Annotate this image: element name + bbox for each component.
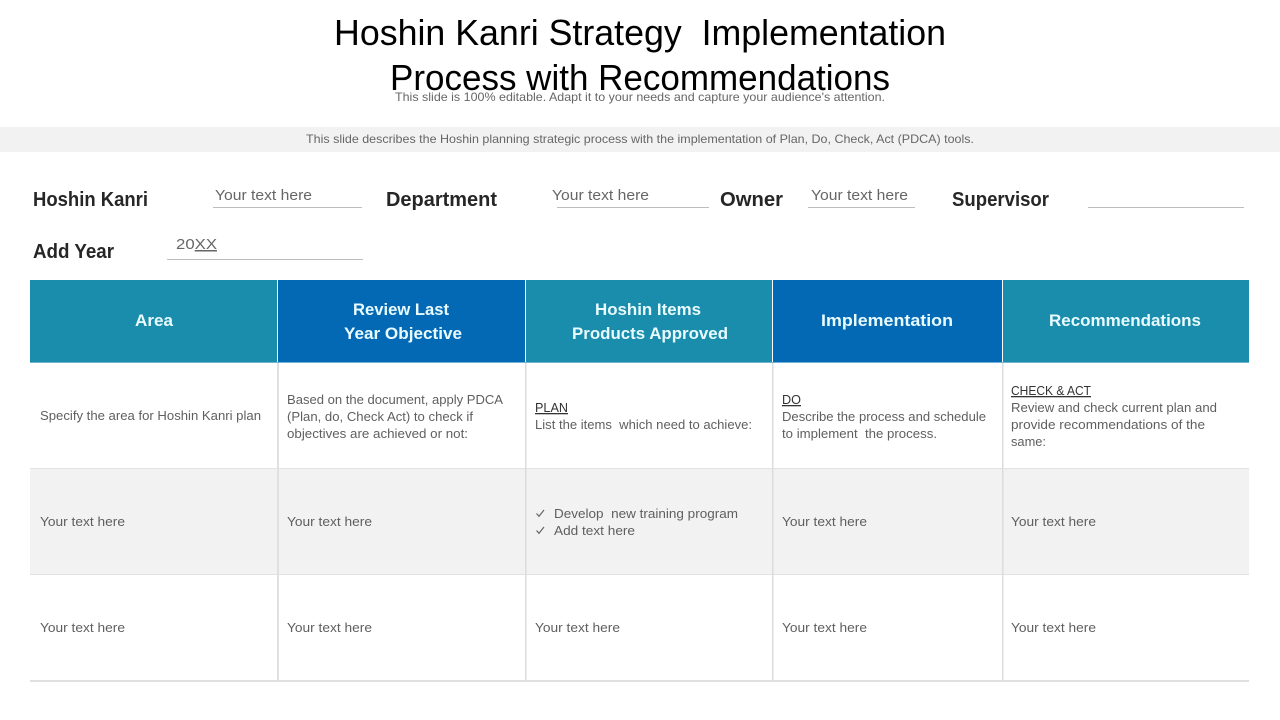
subtitle: This slide is 100% editable. Adapt it to your needs and capture your audience's attention. — [395, 90, 885, 104]
cell: do: Describe the process and schedule — [782, 409, 986, 424]
form field: Owner: Your text here — [811, 187, 908, 204]
header: Review Last Year Objective — [278, 280, 525, 363]
row 2 cells: Your text here — [782, 514, 867, 529]
row 3 cells: Your text here — [535, 620, 620, 635]
form field: Add Year — [33, 236, 363, 263]
cell: do: to implement the process. — [782, 426, 937, 441]
header: Hoshin Items Products Approved — [526, 280, 772, 363]
cell: do — [782, 392, 986, 441]
row 3 cells — [40, 620, 1096, 635]
cell: do: DO — [782, 392, 801, 407]
cell: area instruction: Specify the area for Hoshin Kanri plan — [40, 408, 261, 423]
title — [334, 12, 946, 98]
header bottom edge — [30, 362, 1249, 363]
cell: review instruction: Based on the document, apply PDCA — [287, 392, 503, 407]
cell: review instruction: (Plan, do, Check Act) to check if — [287, 409, 473, 424]
form field: Add Year: Add Year — [33, 241, 114, 263]
header: Implementation — [773, 280, 1002, 363]
checklist — [536, 506, 738, 538]
title: Hoshin Kanri Strategy Implementation — [334, 12, 946, 53]
form field: Hoshin Kanri — [33, 187, 362, 211]
form field: Department — [386, 187, 709, 211]
checklist item one: Develop new training program — [554, 506, 738, 521]
row 2 cells: Your text here — [287, 514, 372, 529]
cell: check and act — [1011, 383, 1217, 449]
header: Hoshin Items Products Approved: Products Approved — [572, 324, 728, 343]
description band: This slide describes the Hoshin planning strategic process with the implementation of Plan, Do, Check, Act (PDCA) tools. — [306, 132, 974, 146]
header: Review Last Year Objective: Review Last — [353, 300, 449, 319]
row backgrounds — [30, 363, 1249, 682]
cell: plan — [535, 400, 752, 432]
row 3 cells: Your text here — [1011, 620, 1096, 635]
form field: Hoshin Kanri: Hoshin Kanri — [33, 189, 148, 211]
row 2 cells: Your text here — [1011, 514, 1096, 529]
cell: plan: List the items which need to achieve: — [535, 417, 752, 432]
header: Recommendations — [1003, 280, 1249, 363]
header: Hoshin Items Products Approved: Hoshin Items — [595, 300, 701, 319]
header: Review Last Year Objective: Year Objective — [344, 324, 462, 343]
cell: check and act: CHECK & ACT — [1011, 383, 1091, 398]
row 2 cells: Your text here — [40, 514, 125, 529]
form field: Add Year: 20XX — [176, 236, 217, 253]
form field: Hoshin Kanri: Your text here — [215, 187, 312, 204]
header: Area: Area — [135, 311, 174, 330]
header: Recommendations: Recommendations — [1049, 311, 1201, 330]
row 3 cells: Your text here — [782, 620, 867, 635]
row 3 cells: Your text here — [40, 620, 125, 635]
title: Process with Recommendations — [390, 57, 890, 98]
form field: Owner — [720, 187, 915, 211]
form field: Department: Your text here — [552, 187, 649, 204]
icon: check mark — [536, 527, 544, 533]
cell: plan: PLAN — [535, 400, 568, 415]
cell: review instruction — [287, 392, 503, 441]
form field: Department: Department — [386, 189, 497, 211]
checklist item two: Add text here — [554, 523, 635, 538]
header: Implementation: Implementation — [821, 311, 953, 330]
cell: check and act: Review and check current plan and — [1011, 400, 1217, 415]
row 3 cells: Your text here — [287, 620, 372, 635]
description band — [0, 127, 1280, 152]
table — [30, 280, 1249, 682]
row 2 cells — [40, 514, 1096, 529]
icon: check mark — [536, 510, 544, 516]
form field: Owner: Owner — [720, 189, 783, 211]
cell: review instruction: objectives are achieved or not: — [287, 426, 468, 441]
cell: check and act: provide recommendations of the — [1011, 417, 1205, 432]
form field: Supervisor: Supervisor — [952, 189, 1049, 211]
cell: check and act: same: — [1011, 434, 1046, 449]
header: Area — [30, 280, 277, 363]
